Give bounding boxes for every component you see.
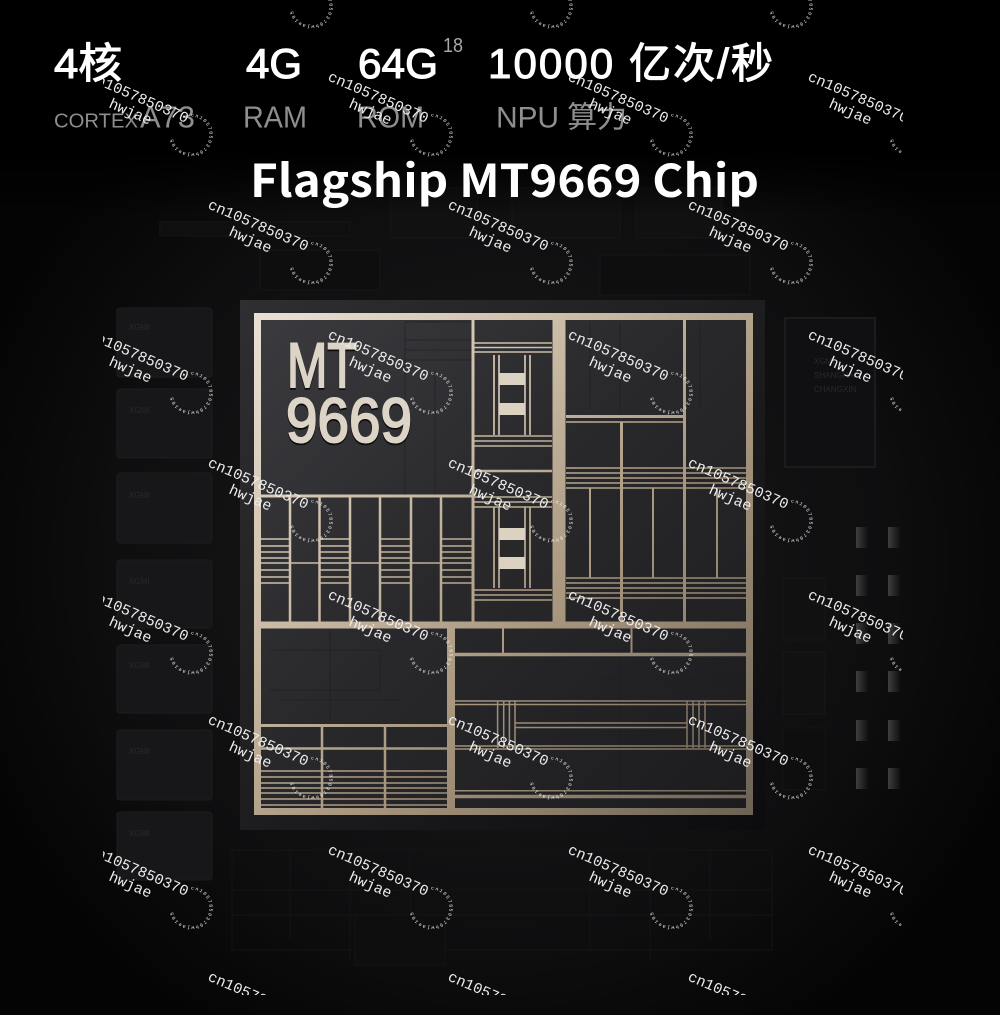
watermarks: cn1057850370hwjae105 <box>290 757 333 800</box>
watermarks: cn1057850370 <box>805 587 911 646</box>
watermarks: cn1057850370 <box>685 197 791 256</box>
chip name: MT <box>287 331 357 401</box>
watermarks: hwjae <box>706 739 754 773</box>
spec: RAM: 4G <box>246 40 302 87</box>
watermarks: hwjae <box>346 354 394 388</box>
watermarks: cn1057850370 <box>325 327 431 386</box>
watermarks: hwjae <box>466 224 514 258</box>
watermarks: cn1057850370 <box>805 327 911 386</box>
spec: 4 cores: 4核 <box>54 40 122 87</box>
watermarks: hwjae <box>106 96 154 130</box>
chip name: MT <box>287 332 357 402</box>
right chips: XGMI <box>814 357 834 366</box>
watermarks: cn1057850370 <box>85 327 191 386</box>
watermarks: cn1057850370hwjae105 <box>410 887 453 930</box>
spec: RAM: RAM <box>243 100 307 134</box>
spec: ROM: 64G <box>358 40 438 87</box>
watermarks: cn1057850370 <box>565 327 671 386</box>
watermarks: cn1057850370hwjae105 <box>530 500 573 543</box>
watermarks: hwjae <box>346 614 394 648</box>
watermarks: cn1057850370hwjae105 <box>890 658 902 671</box>
title: Flagship MT9669 Chip <box>250 145 759 210</box>
watermarks: cn1057850370 <box>325 69 431 128</box>
watermarks: cn1057850370 <box>445 197 551 256</box>
spec: NPU: 10000 亿次/秒 <box>488 40 773 87</box>
spec: NPU: NPU 算力 <box>496 102 627 134</box>
left memory chips <box>117 308 212 880</box>
watermarks: hwjae <box>106 869 154 903</box>
watermarks: cn1057850370hwjae105 <box>410 372 453 415</box>
watermarks: cn1057850370 <box>85 587 191 646</box>
watermarks: cn1057850370hwjae105 <box>890 140 902 153</box>
watermarks: hwjae <box>346 96 394 130</box>
watermarks: cn1057850370hwjae105 <box>290 500 333 543</box>
top chips <box>160 188 750 295</box>
spec: ROM: 18 <box>443 35 463 57</box>
watermarks: cn1057850370 <box>205 455 311 514</box>
watermarks: cn1057850370hwjae105 <box>890 912 902 926</box>
watermarks: cn1057850370 <box>325 587 431 646</box>
lower vertical band <box>447 625 455 815</box>
left memory chips: XGMI <box>129 577 149 586</box>
watermarks: hwjae <box>106 614 154 648</box>
horizontal band <box>257 622 750 628</box>
spec: RAM <box>243 40 307 134</box>
spec: ROM: ROM <box>357 100 424 134</box>
right chips: SHANGHAI <box>814 371 856 380</box>
right chips: CHANGXIN <box>814 385 856 394</box>
central vertical band <box>552 316 566 625</box>
watermarks: cn1057850370hwjae105 <box>530 242 573 285</box>
spec: 4 cores: A73 <box>140 100 195 134</box>
watermarks: hwjae <box>106 354 154 388</box>
chip package <box>240 300 765 830</box>
left memory chips: XGMI <box>129 747 149 756</box>
panel inner traces <box>270 322 740 800</box>
right chips <box>783 318 875 790</box>
bottom traces <box>232 850 772 965</box>
watermarks: hwjae <box>826 96 874 130</box>
chip die panels <box>254 313 753 815</box>
watermarks: cn1057850370hwjae105 <box>770 500 813 543</box>
watermarks: cn1057850370 <box>85 69 191 128</box>
gold frame and wiring <box>257 316 750 815</box>
watermarks: hwjae <box>226 739 274 773</box>
watermarks: cn1057850370 <box>325 842 431 901</box>
watermarks: hwjae <box>226 482 274 516</box>
circuit board surroundings <box>117 188 900 965</box>
chip name <box>286 331 412 458</box>
watermarks: cn1057850370hwjae105 <box>410 632 453 675</box>
chip name: 9669 <box>286 388 412 458</box>
watermarks: cn1057850370hwjae105 <box>770 242 813 285</box>
watermarks: cn1057850370 <box>565 587 671 646</box>
watermarks: hwjae <box>586 96 634 130</box>
watermarks: cn1057850370hwjae105 <box>290 242 333 285</box>
spec: ROM <box>357 35 463 134</box>
chip name: 9669 <box>286 386 412 456</box>
watermarks: hwjae <box>226 224 274 258</box>
left memory chips: XGMI <box>129 491 149 500</box>
top fade <box>0 0 1000 215</box>
watermarks: hwjae <box>826 614 874 648</box>
watermarks: hwjae <box>466 739 514 773</box>
middle column <box>474 343 552 600</box>
watermarks: cn1057850370 <box>205 197 311 256</box>
watermarks: cn1057850370 <box>445 455 551 514</box>
top-left block <box>261 316 473 625</box>
watermarks: hwjae <box>826 869 874 903</box>
left memory chips: XGMI <box>129 406 149 415</box>
right connector pins <box>856 527 900 789</box>
watermarks: hwjae <box>586 614 634 648</box>
spec: 4 cores: CORTEX <box>54 110 138 132</box>
watermarks: cn1057850370hwjae105 <box>170 632 213 675</box>
watermarks: cn1057850370hwjae105 <box>650 372 693 415</box>
right block <box>566 318 746 622</box>
watermarks: hwjae <box>706 224 754 258</box>
watermarks: cn1057850370 <box>85 842 191 901</box>
watermarks: cn1057850370 <box>805 69 911 128</box>
watermarks: cn1057850370hwjae105 <box>650 114 693 157</box>
lower right block <box>455 628 747 796</box>
watermarks: cn1057850370 <box>445 712 551 771</box>
watermarks: hwjae <box>826 354 874 388</box>
watermarks: cn1057850370 <box>685 455 791 514</box>
watermarks: cn1057850370 <box>565 69 671 128</box>
watermarks: cn1057850370hwjae105 <box>530 757 573 800</box>
watermarks: cn1057850370hwjae105 <box>650 632 693 675</box>
watermarks: cn1057850370hwjae105 <box>890 398 902 411</box>
watermarks: cn1057850370hwjae105 <box>170 114 213 157</box>
spec: 4 cores <box>54 40 195 134</box>
left memory chips: XGMI <box>129 661 149 670</box>
left memory chips: XGMI <box>129 829 149 838</box>
watermarks: cn1057850370 <box>805 842 911 901</box>
watermarks: cn1057850370 <box>685 712 791 771</box>
watermarks: cn1057850370hwjae105 <box>410 114 453 157</box>
watermarks: hwjae <box>586 869 634 903</box>
watermarks: hwjae <box>346 869 394 903</box>
outer frame <box>258 316 750 812</box>
watermarks: hwjae <box>466 482 514 516</box>
lower left block <box>261 725 447 808</box>
spec: NPU <box>488 40 773 134</box>
watermarks: hwjae <box>706 482 754 516</box>
watermarks: cn1057850370hwjae105 <box>650 887 693 930</box>
watermarks: hwjae <box>586 354 634 388</box>
watermarks: cn1057850370 <box>565 842 671 901</box>
left memory chips: XGMI <box>129 323 149 332</box>
watermarks: cn1057850370hwjae105 <box>170 372 213 415</box>
watermarks: cn1057850370hwjae105 <box>770 757 813 800</box>
watermarks: cn1057850370 <box>205 712 311 771</box>
watermarks: cn1057850370hwjae105 <box>170 887 213 930</box>
